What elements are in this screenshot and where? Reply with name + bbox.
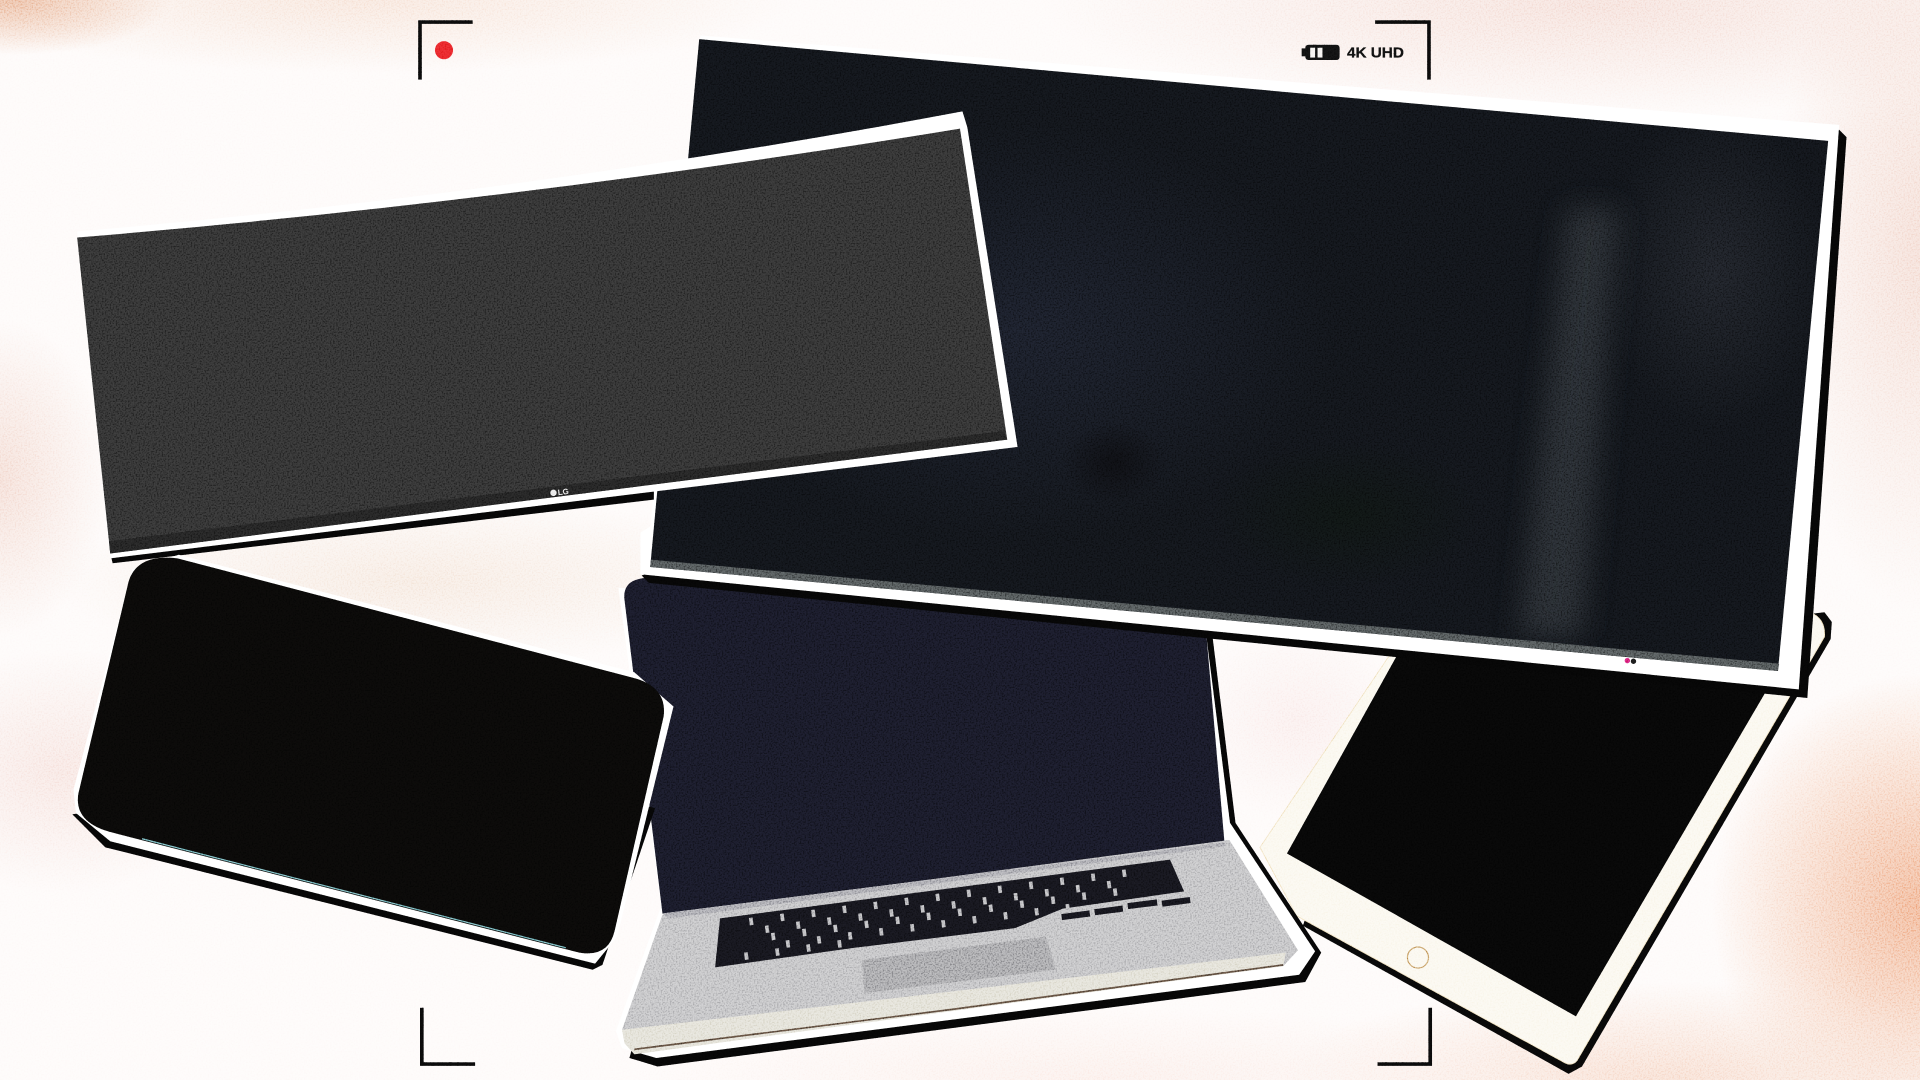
tablet body	[1260, 612, 1825, 1064]
monitor black shadow	[110, 487, 654, 563]
tablet home button	[1407, 947, 1428, 968]
phone body	[78, 558, 664, 953]
device: tablet	[1260, 612, 1832, 1074]
laptop white outline	[616, 588, 1315, 1058]
television screen reflections	[964, 131, 1777, 643]
laptop screen	[624, 578, 1224, 913]
phone edge highlight	[142, 839, 566, 948]
television screen	[650, 39, 1828, 671]
record indicator	[435, 41, 453, 59]
corner bracket bottom right	[1378, 1008, 1430, 1064]
corner bracket top left	[420, 22, 473, 80]
phone black shadow	[72, 735, 655, 970]
tablet screen	[1287, 655, 1766, 1016]
television black shadow	[642, 130, 1847, 698]
laptop shadow line under lip	[634, 965, 1283, 1049]
device: television	[640, 36, 1847, 698]
icon: battery	[1302, 45, 1340, 60]
keyboard key gaps	[744, 871, 1145, 956]
monitor bottom bezel	[109, 431, 1007, 553]
monitor white border	[77, 111, 1018, 558]
corner bracket top right	[1375, 22, 1429, 80]
keyboard	[715, 860, 1190, 967]
battery and resolution badge	[1302, 45, 1404, 62]
device: desktop monitor	[77, 111, 1018, 563]
laptop base	[622, 840, 1298, 1049]
corner bracket bottom left	[422, 1008, 475, 1064]
trackpad	[862, 937, 1056, 993]
television bottom bezel	[650, 560, 1779, 671]
keyboard lower keys	[1062, 900, 1190, 917]
device: smartphone	[72, 555, 673, 970]
phone white border	[73, 555, 673, 964]
television power light	[1625, 658, 1636, 664]
viewfinder frame	[420, 22, 1430, 1064]
monitor logo	[550, 487, 569, 498]
television white border	[640, 36, 1839, 689]
monitor screen	[77, 129, 1007, 553]
laptop black outline	[629, 612, 1321, 1067]
device: laptop	[616, 578, 1321, 1067]
label: 4K UHD: 4K UHD	[1347, 45, 1404, 62]
monitor logo: LG	[557, 487, 569, 497]
laptop front lip	[622, 953, 1286, 1054]
tablet shadow	[1303, 612, 1832, 1074]
laptop hinge	[662, 842, 1226, 918]
